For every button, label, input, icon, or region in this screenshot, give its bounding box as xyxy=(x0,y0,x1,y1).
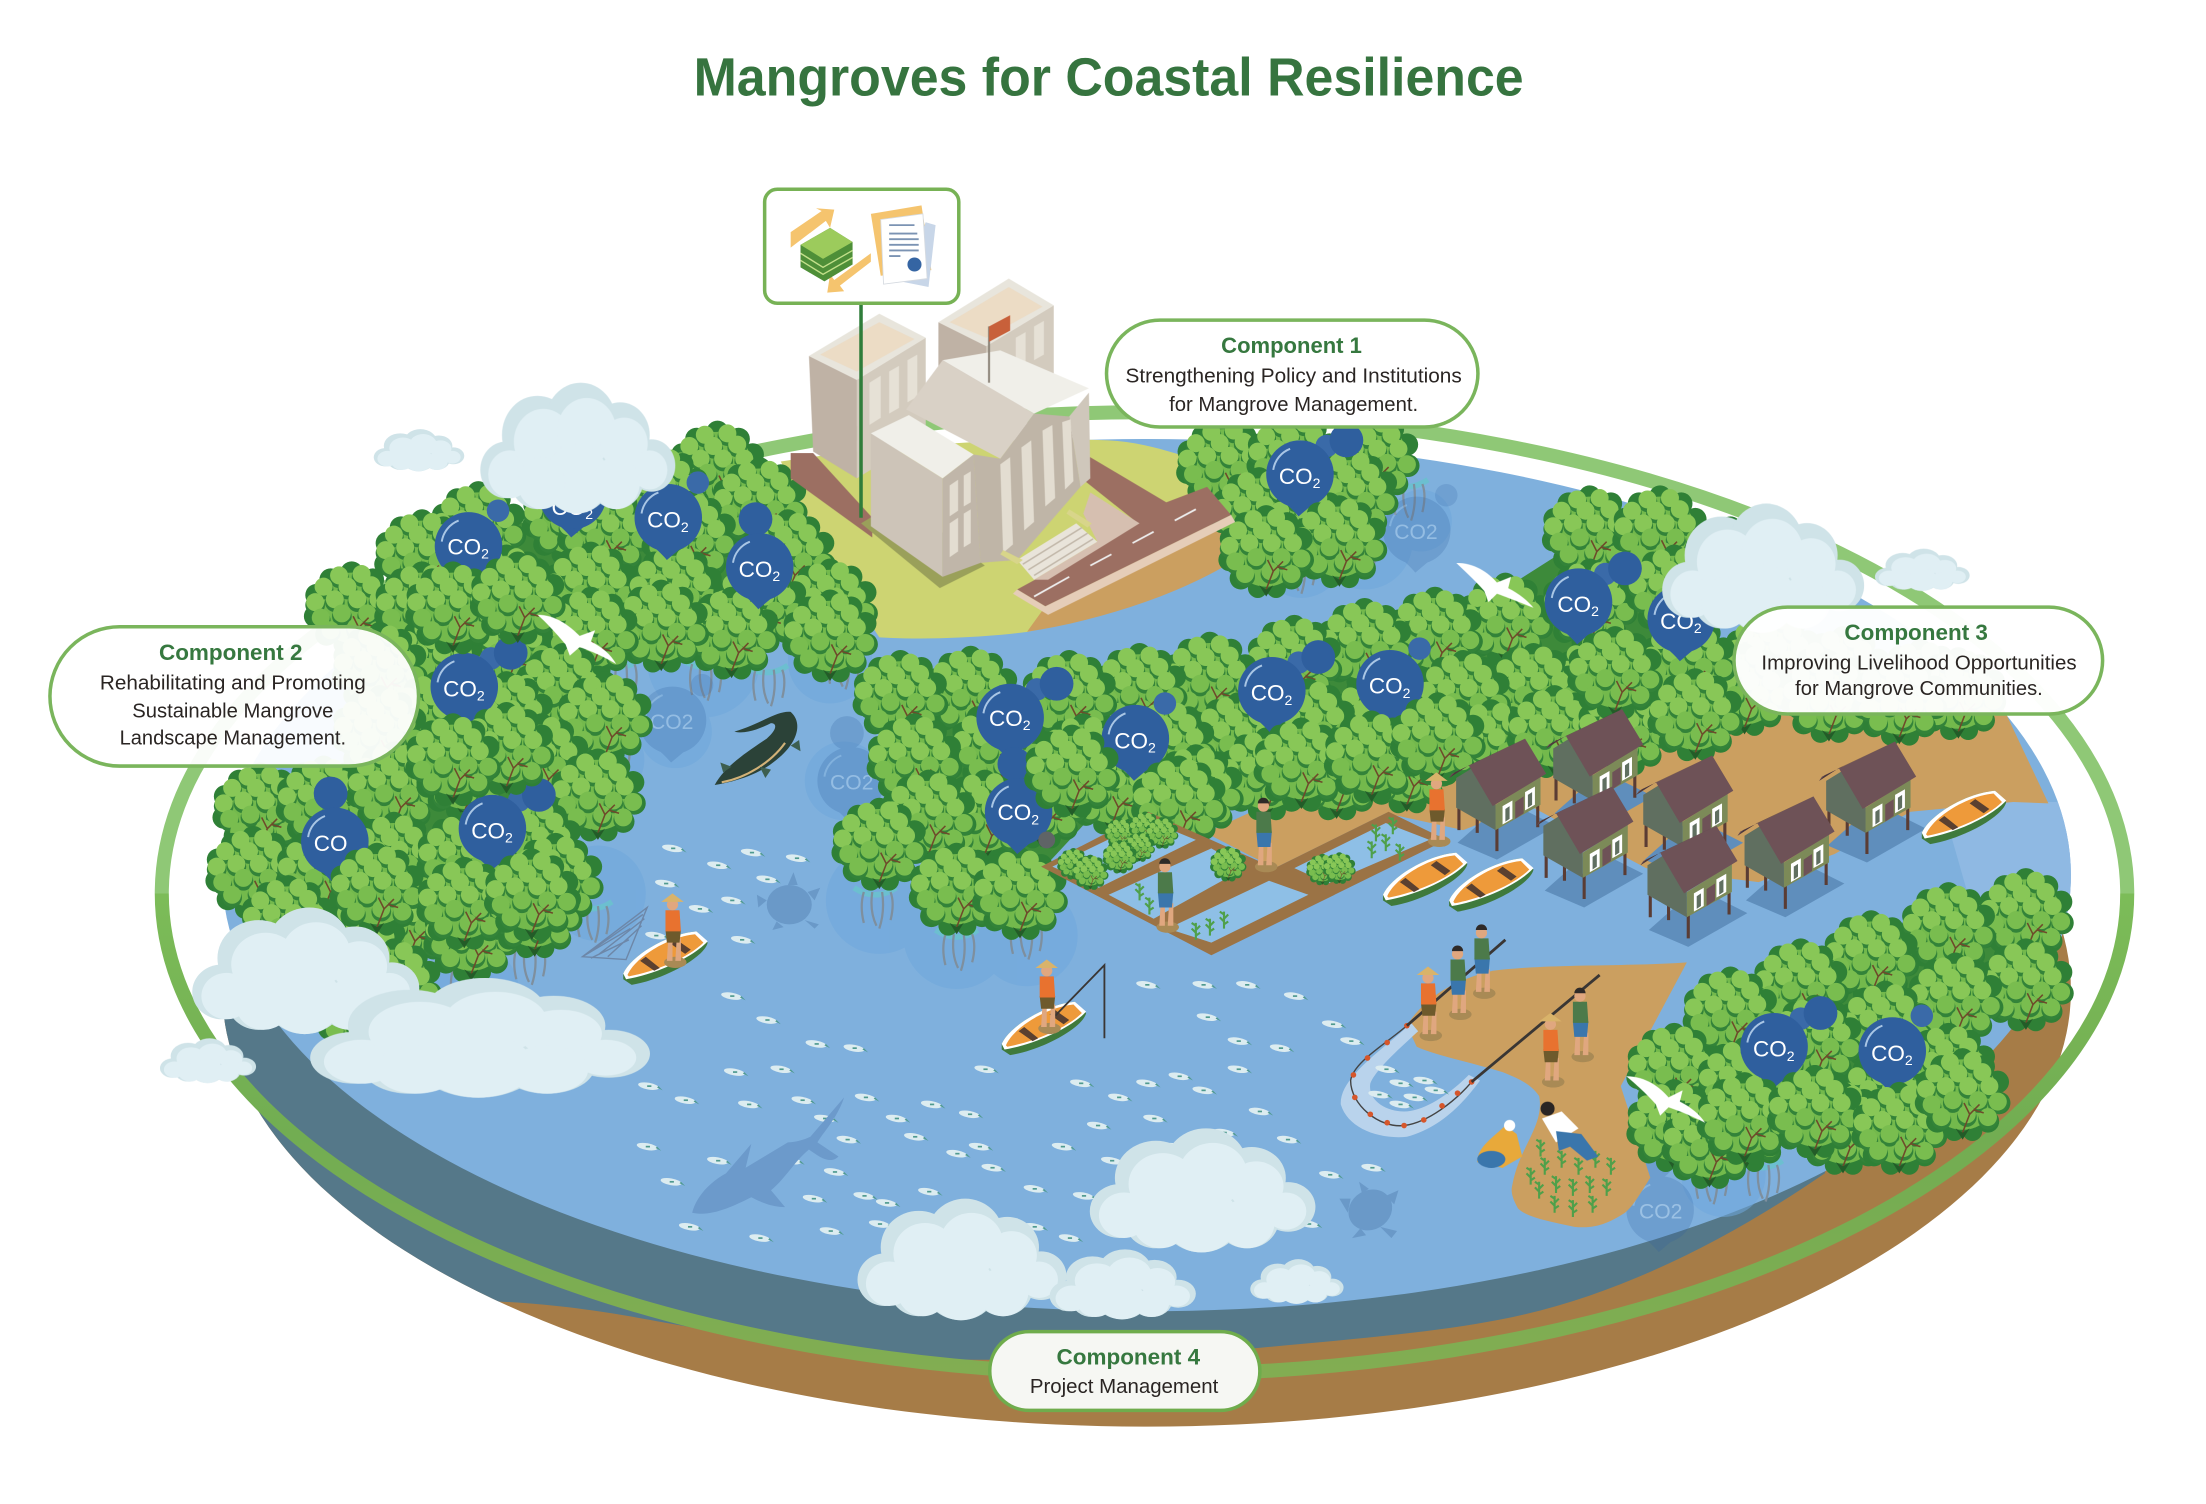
CO2 bubbles: 2 xyxy=(477,688,485,704)
CO2 bubbles: CO xyxy=(447,534,481,559)
callout: component 1: Strengthening Policy and Institutions xyxy=(1126,366,1462,388)
CO2 bubbles: CO xyxy=(1279,464,1313,489)
cast net of boat fisher xyxy=(582,907,647,960)
island base: soil xyxy=(222,554,2071,1427)
CO2 bubbles: 2 xyxy=(1694,620,1702,636)
CO2 bubbles: 2 xyxy=(1148,740,1156,756)
CO2 bubbles: CO xyxy=(1114,728,1148,753)
CO2 bubbles: CO xyxy=(997,800,1031,825)
pond seedlings and shrubs xyxy=(1057,811,1404,940)
callout: component 3: Improving Livelihood Opportunities xyxy=(1761,653,2077,675)
forest canopy underlay xyxy=(260,457,2026,1128)
boats xyxy=(623,791,2006,1055)
callout: component 3: for Mangrove Communities. xyxy=(1795,678,2043,700)
CO2 bubbles: 2 xyxy=(1023,717,1031,733)
callout: component 1 xyxy=(1107,320,1478,427)
turtle, upper xyxy=(757,872,820,930)
CO2 bubbles: CO xyxy=(1753,1037,1787,1062)
grey stone beside pond xyxy=(1038,831,1055,848)
faded underwater CO2 bubbles: CO2 xyxy=(650,711,693,734)
CO2 bubbles: 2 xyxy=(1284,692,1292,708)
shark silhouette xyxy=(692,1097,844,1214)
pointer line to finance card xyxy=(860,304,862,518)
CO2 bubbles: CO xyxy=(739,557,772,582)
crocodile xyxy=(715,712,801,785)
CO2 bubbles: CO xyxy=(314,831,347,856)
sand strip beside road xyxy=(1027,515,1258,632)
CO2 bubbles: CO xyxy=(647,508,681,533)
CO2 bubbles: CO xyxy=(471,819,505,844)
callout: component 2: Landscape Management. xyxy=(120,727,346,749)
CO2 bubbles xyxy=(301,423,1933,1093)
roads xyxy=(791,453,1235,615)
CO2 bubbles: 2 xyxy=(1905,1052,1913,1068)
birds xyxy=(537,563,1705,1123)
CO2 bubbles: CO xyxy=(989,706,1023,731)
CO2 bubbles: 2 xyxy=(1313,475,1321,491)
finance and policy card xyxy=(765,189,959,303)
land behind the building xyxy=(781,439,1258,638)
island side: slate band xyxy=(224,1018,1826,1360)
tan land behind village xyxy=(1206,696,2048,882)
CO2 bubbles: 2 xyxy=(1591,603,1599,619)
CO2 bubbles: 2 xyxy=(481,546,489,562)
building: main hall xyxy=(861,315,1140,588)
CO2 bubbles: CO xyxy=(443,676,477,701)
CO2 bubbles: 2 xyxy=(1031,811,1039,827)
CO2 bubbles: 2 xyxy=(1403,685,1411,701)
net catch fish xyxy=(1368,1064,1449,1110)
sand spit xyxy=(1407,962,1687,1227)
faded underwater CO2 bubbles: CO2 xyxy=(1639,1200,1682,1223)
rice seedlings xyxy=(1526,1140,1615,1217)
turtle, lower xyxy=(1339,1182,1400,1238)
aquaculture pond frame xyxy=(1041,812,1446,955)
mangrove forest: upper left xyxy=(205,421,878,1066)
village houses xyxy=(1449,709,1926,947)
fishing net xyxy=(1341,940,1600,1137)
faded underwater CO2 bubbles: CO2 xyxy=(830,771,873,794)
CO2 bubbles: CO xyxy=(1251,681,1284,706)
water surface xyxy=(222,439,2071,1311)
icon: cash stack xyxy=(801,228,853,281)
CO2 bubbles: 2 xyxy=(681,519,689,535)
building: left tower xyxy=(809,314,926,478)
women planting rice xyxy=(1477,1102,1598,1168)
building: back tower xyxy=(938,279,1054,422)
green project ring xyxy=(162,412,2127,1375)
callout: component 2 xyxy=(50,627,419,766)
CO2 bubbles: CO xyxy=(1369,674,1403,699)
callout: component 3 xyxy=(1734,607,2103,714)
mangrove forest: lower right xyxy=(1626,868,2074,1189)
school of fish xyxy=(636,843,1386,1243)
mangrove roots xyxy=(387,480,1783,1204)
callout: component 4: Project Management xyxy=(1030,1376,1219,1398)
mangrove forest: top centre xyxy=(1176,411,1420,578)
mangrove forest: central belt xyxy=(831,485,2006,940)
icon: exchange arrows xyxy=(791,208,871,293)
CO2 bubbles: CO xyxy=(1871,1041,1905,1066)
mangrove root halos xyxy=(423,490,1766,1217)
callout: component 2: Component 2 xyxy=(159,640,302,665)
clouds xyxy=(160,383,1970,1320)
callout: component 4 xyxy=(990,1332,1260,1410)
title: Mangroves for Coastal Resilience xyxy=(694,48,1524,108)
callout: component 4: Component 4 xyxy=(1057,1345,1201,1370)
fishing rod xyxy=(1055,965,1104,1038)
callout: component 3: Component 3 xyxy=(1844,620,1988,645)
CO2 bubbles: 2 xyxy=(772,568,780,584)
callout: component 1: for Mangrove Management. xyxy=(1169,394,1418,416)
CO2 bubbles: CO xyxy=(1557,592,1591,617)
CO2 bubbles: 2 xyxy=(505,830,513,846)
callout: component 2: Sustainable Mangrove xyxy=(132,701,333,723)
CO2 bubbles: CO xyxy=(1660,609,1694,634)
icon: policy document xyxy=(871,205,936,287)
lighter water edge xyxy=(1944,802,2071,952)
CO2 bubbles: 2 xyxy=(1787,1048,1795,1064)
pond compartments xyxy=(1052,820,1429,943)
faded underwater CO2 bubbles: CO2 xyxy=(1394,521,1438,544)
people xyxy=(661,772,1594,1088)
trees overlapping bubbles xyxy=(329,495,2010,1175)
faded underwater CO2 bubbles xyxy=(639,484,1694,1252)
CO2 bubbles: 2 xyxy=(585,506,593,522)
callout: component 2: Rehabilitating and Promoting xyxy=(100,672,366,694)
callout: component 1: Component 1 xyxy=(1221,333,1362,358)
CO2 bubbles: CO xyxy=(551,495,585,520)
